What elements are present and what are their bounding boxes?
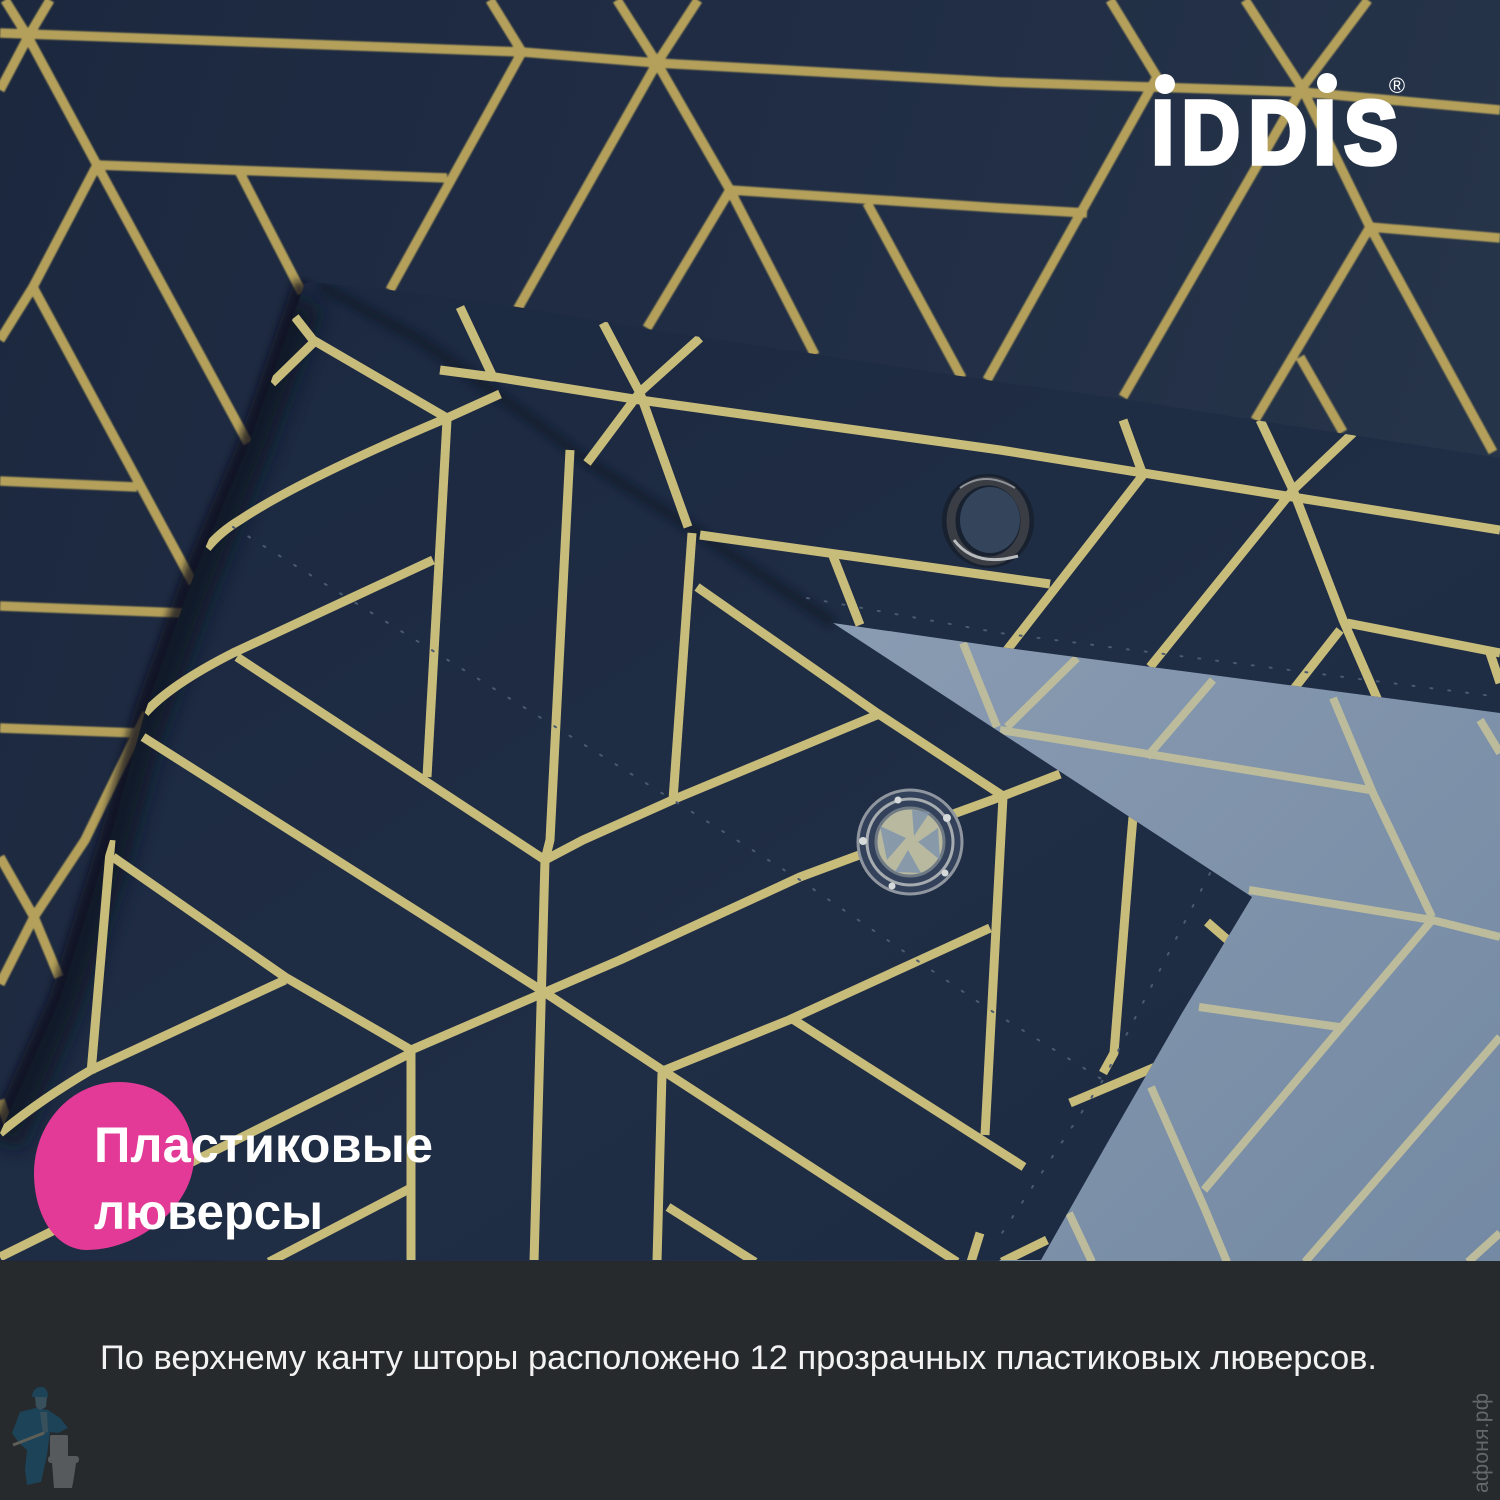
crease between hem and flap — [320, 285, 833, 623]
heading: Пластиковые — [94, 1117, 433, 1173]
drop shadow under curtain flap — [0, 283, 305, 1133]
plumber face and shirt — [35, 1397, 48, 1434]
wrench — [13, 1433, 44, 1445]
registered trademark mark: ® — [1389, 73, 1405, 98]
pink accent blob — [34, 1082, 194, 1250]
toilet — [48, 1435, 79, 1488]
gold lines on the flap — [0, 307, 1500, 1262]
light reverse side of curtain — [820, 615, 1500, 1262]
watermark site name: афоня.рф — [1470, 1393, 1493, 1493]
shaded fold along left flap edge — [0, 300, 300, 1140]
heading — [94, 1117, 433, 1240]
caption text: По верхнему канту шторы расположено 12 прозрачных пластиковых люверсов. — [100, 1339, 1377, 1377]
gold lines of background pattern — [0, 0, 1500, 1123]
bottom dark caption band — [0, 1261, 1500, 1500]
front curtain flap with hem and folded corner — [0, 270, 1500, 1262]
pale pattern lines on reverse side — [963, 643, 1500, 1262]
heading: люверсы — [94, 1184, 323, 1240]
plumber figure — [12, 1387, 68, 1485]
stitching lines on hem and flap — [233, 527, 1500, 1233]
blue wedges seen through eyelet — [880, 810, 940, 873]
eyelet studs — [859, 796, 951, 890]
watermark: plumber with toilet — [12, 1387, 79, 1488]
transparent plastic eyelet on the flap — [858, 790, 962, 894]
metal eyelet on the hem — [942, 474, 1034, 568]
brand logo IDDIS: IDDIS — [1152, 83, 1398, 183]
